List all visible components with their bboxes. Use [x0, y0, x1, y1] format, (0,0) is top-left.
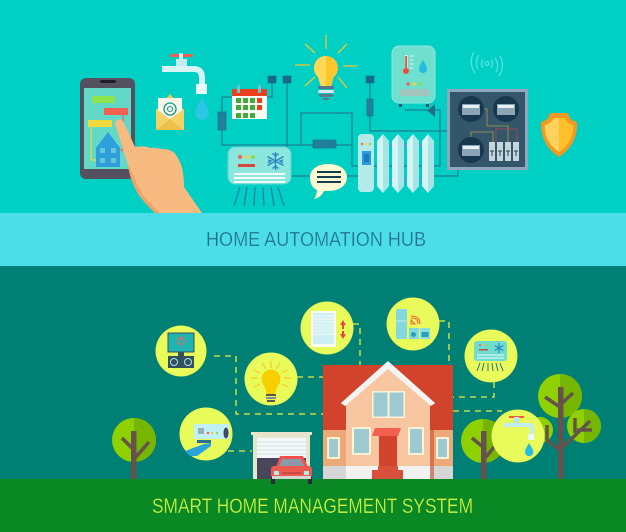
- tree middle: [461, 419, 505, 480]
- icon: smartphone: [80, 78, 135, 179]
- icon: light bulb: [295, 35, 357, 100]
- facade: [346, 365, 430, 467]
- node: light bulb: [244, 352, 298, 406]
- node: air conditioner: [464, 330, 518, 382]
- icon: radiator: [358, 134, 434, 193]
- band: home automation hub: [0, 213, 626, 266]
- circuit breakers: [489, 142, 519, 161]
- icon: air conditioner: [228, 147, 291, 206]
- icon: wireless signal: [471, 52, 502, 76]
- band: smart home management system: [0, 479, 626, 532]
- door and steps: [379, 436, 397, 467]
- tree right: [527, 374, 601, 480]
- meter dials: [458, 96, 519, 163]
- icon: calendar: [232, 85, 267, 119]
- icon: speech bubble: [310, 164, 347, 199]
- gable trim: [342, 362, 434, 405]
- water drop: [195, 98, 209, 120]
- wiring network: [222, 83, 458, 176]
- heading: SMART HOME MANAGEMENT SYSTEM: [152, 495, 473, 518]
- lower windows: [352, 427, 371, 455]
- icon: email envelope: [156, 94, 184, 130]
- icon: faucet: [162, 53, 209, 120]
- dashed connection lines: [214, 321, 502, 451]
- connectors and resistors: [218, 76, 374, 148]
- node: smart blinds: [300, 302, 354, 354]
- icon: pointing hand: [115, 119, 202, 213]
- car: [271, 456, 312, 484]
- node: faucet: [492, 410, 544, 462]
- icon: electric meter panel: [447, 89, 528, 170]
- icon: thermostat boiler: [392, 46, 435, 117]
- heading: HOME AUTOMATION HUB: [206, 228, 426, 251]
- node: home appliances: [386, 298, 440, 350]
- icon: shield: [541, 113, 577, 157]
- node: security camera: [180, 408, 232, 460]
- tree left: [112, 418, 156, 480]
- house: [323, 362, 453, 479]
- upper window: [372, 391, 405, 418]
- garage: [251, 432, 312, 479]
- roof: [323, 365, 453, 431]
- node: tv and stereo: [156, 326, 206, 376]
